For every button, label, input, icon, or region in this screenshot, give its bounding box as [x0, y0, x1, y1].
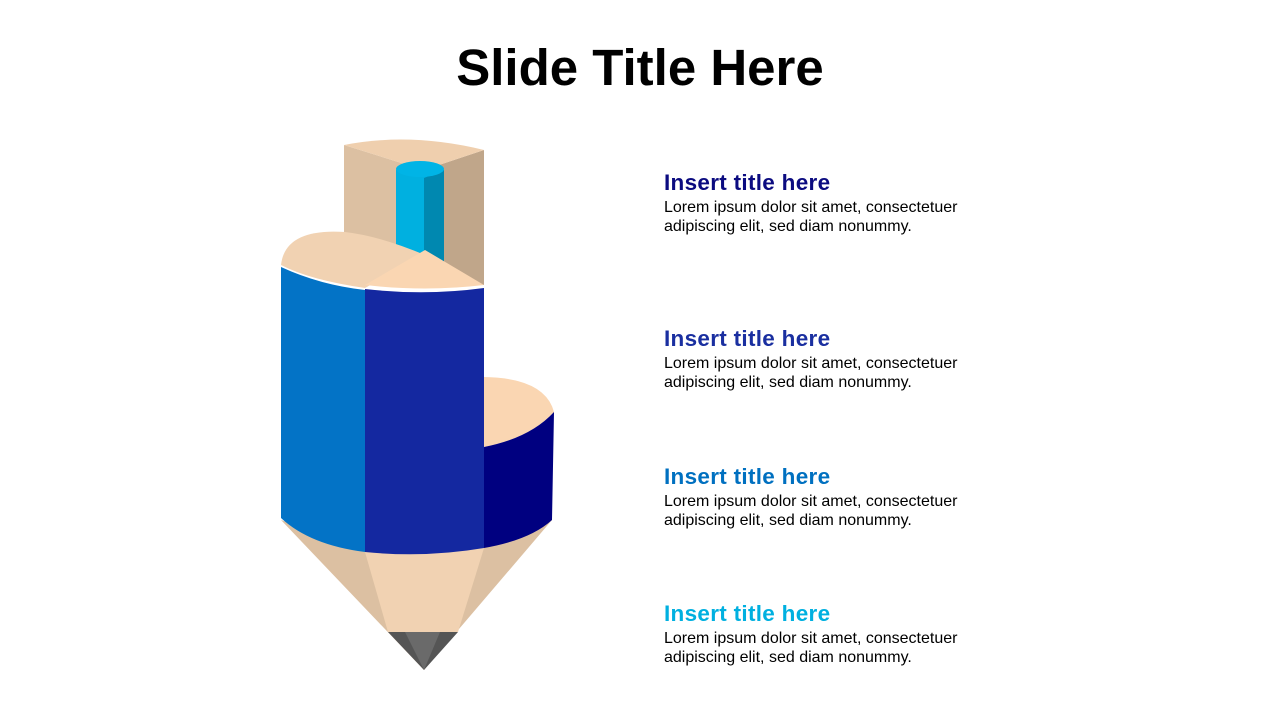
text block 3: adipiscing elit, sed diam nonummy. — [664, 512, 912, 529]
text block 3: Lorem ipsum dolor sit amet, consectetuer — [664, 493, 957, 510]
title: Slide Title Here — [456, 39, 824, 96]
text block 4: adipiscing elit, sed diam nonummy. — [664, 649, 912, 666]
text block 1: adipiscing elit, sed diam nonummy. — [664, 218, 912, 235]
text block 1: Insert title here — [664, 170, 830, 195]
text block 4: Lorem ipsum dolor sit amet, consectetuer — [664, 630, 957, 647]
left cylinder — [281, 232, 425, 552]
cone tip — [281, 520, 552, 670]
text block 2 — [664, 326, 958, 391]
text block 1: Lorem ipsum dolor sit amet, consectetuer — [664, 199, 957, 216]
right short cylinder — [484, 377, 554, 548]
text block 2: adipiscing elit, sed diam nonummy. — [664, 374, 912, 391]
middle segment — [365, 250, 484, 554]
text block 2: Lorem ipsum dolor sit amet, consectetuer — [664, 355, 957, 372]
text block 1 — [664, 170, 958, 235]
text block 4: Insert title here — [664, 601, 830, 626]
top block with lead — [344, 140, 484, 285]
text block 4 — [664, 601, 958, 666]
text block 3: Insert title here — [664, 464, 830, 489]
text block 3 — [664, 464, 958, 529]
text block 2: Insert title here — [664, 326, 830, 351]
